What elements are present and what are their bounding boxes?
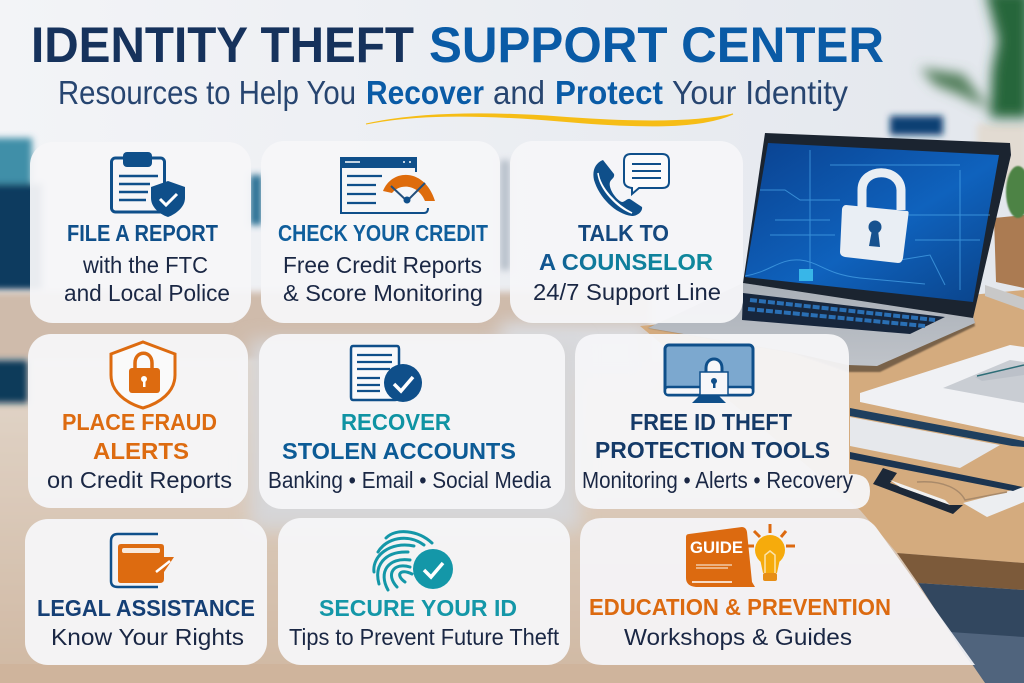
icon: clipboard with shield	[112, 152, 185, 217]
panel: legal assistance: Know Your Rights	[51, 624, 244, 650]
icon: folder with pen	[111, 534, 174, 587]
panel: file a report	[30, 142, 251, 323]
desk top right	[640, 290, 1024, 563]
panel: file a report: FILE A REPORT	[67, 220, 218, 246]
panel: free id theft protection tools: FREE ID THEFT	[630, 409, 792, 435]
laptop photo with padlock	[648, 133, 1011, 372]
subtitle: Resources to Help You	[58, 74, 356, 111]
title: SUPPORT CENTER	[429, 17, 884, 73]
panel: secure your id: Tips to Prevent Future Theft	[289, 624, 560, 650]
panel: place fraud alerts: PLACE FRAUD	[62, 409, 217, 435]
panel: place fraud alerts: on Credit Reports	[47, 467, 232, 493]
subtitle: Recover	[366, 74, 484, 111]
panel: talk to a counselor	[510, 141, 743, 323]
panel: check your credit: & Score Monitoring	[283, 280, 483, 306]
panel: check your credit	[261, 141, 500, 323]
icon: guide book with light bulb: GUIDE	[690, 538, 743, 557]
panel: education and prevention: Workshops & Guides	[624, 624, 852, 650]
subtitle: Protect	[555, 74, 663, 111]
subtitle: and	[493, 74, 545, 111]
panel: secure your id: SECURE YOUR ID	[319, 595, 517, 621]
panel: legal assistance: LEGAL ASSISTANCE	[37, 595, 255, 621]
padlock on laptop screen	[840, 173, 909, 263]
panel: education and prevention: EDUCATION & PREVENTION	[589, 594, 891, 620]
panel: recover stolen accounts: STOLEN ACCOUNTS	[282, 438, 516, 464]
panel: talk to a counselor: 24/7 Support Line	[533, 279, 721, 305]
panel: file a report: with the FTC	[82, 252, 208, 278]
panel: recover stolen accounts: RECOVER	[341, 409, 451, 435]
panel: free id theft protection tools: PROTECTION TOOLS	[595, 437, 830, 463]
panel: place fraud alerts: ALERTS	[93, 438, 189, 464]
icon: monitor with padlock	[665, 345, 753, 403]
panel: place fraud alerts	[28, 334, 248, 508]
title	[31, 17, 884, 73]
panel: legal assistance	[25, 519, 267, 665]
subtitle: Your Identity	[672, 74, 848, 111]
icon: browser window with credit gauge	[341, 157, 435, 213]
panel: education and prevention	[580, 518, 975, 665]
panel: check your credit: Free Credit Reports	[283, 252, 482, 278]
subtitle	[58, 74, 848, 111]
panel: check your credit: CHECK YOUR CREDIT	[278, 220, 488, 246]
panel: talk to a counselor: TALK TO	[578, 220, 669, 246]
icon: document with check badge	[351, 346, 422, 402]
panel: free id theft protection tools	[575, 334, 870, 509]
plant pot	[994, 215, 1024, 288]
icon: phone handset with speech bubble	[593, 154, 669, 216]
panel: recover stolen accounts	[259, 334, 565, 509]
panel: secure your id	[278, 518, 570, 665]
panel: recover stolen accounts: Banking • Email • Social Media	[268, 467, 551, 493]
icon: fingerprint with check badge	[374, 532, 453, 590]
yellow swoosh underline	[366, 114, 733, 126]
panel: talk to a counselor: A COUNSELOR	[539, 249, 713, 275]
panel: free id theft protection tools: Monitoring • Alerts • Recovery	[582, 467, 853, 493]
title: IDENTITY THEFT	[31, 17, 414, 73]
desk papers, pens and glasses	[850, 345, 1024, 517]
panel: file a report: and Local Police	[64, 280, 230, 306]
icon: shield with padlock	[111, 342, 175, 408]
icon: guide book with light bulb	[686, 524, 795, 587]
